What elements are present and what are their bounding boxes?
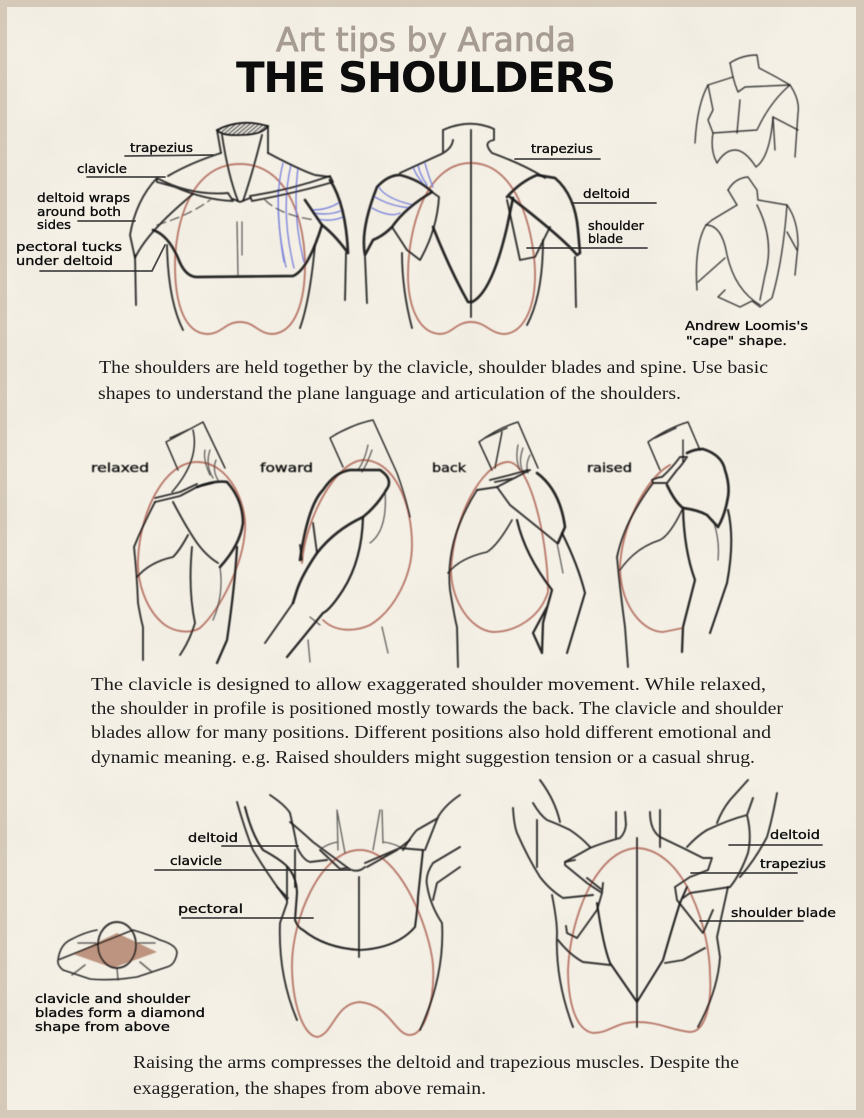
label: diamond caption: blades form a diamond xyxy=(35,1005,205,1020)
right shoulder blade xyxy=(660,837,713,933)
sternum notch xyxy=(233,198,250,202)
rib cage guide xyxy=(302,460,412,630)
deltoid xyxy=(197,482,243,567)
chest side xyxy=(617,483,653,667)
figure: forward xyxy=(260,420,412,662)
labels: front torso xyxy=(16,140,213,271)
label: pectoral tucks xyxy=(16,239,165,271)
label: back: back xyxy=(432,460,467,475)
label: clavicle: clavicle xyxy=(170,853,222,868)
paragraph 3 xyxy=(133,1052,739,1098)
label: deltoid: deltoid xyxy=(583,186,630,201)
neck xyxy=(217,123,268,201)
inner shoulder lines xyxy=(72,943,155,980)
label: pectoral tucks: pectoral tucks xyxy=(16,239,122,254)
label: pectoral: pectoral xyxy=(178,901,243,916)
right deltoid xyxy=(683,780,777,898)
rib cage guide xyxy=(620,465,683,632)
deltoid xyxy=(667,449,729,527)
figure: relaxed xyxy=(91,422,245,663)
left deltoid xyxy=(270,795,327,862)
arm xyxy=(180,547,195,655)
label: andrew loomis cape xyxy=(685,318,808,348)
neck hatch xyxy=(358,445,372,472)
labels: back torso xyxy=(515,141,656,248)
rib cage guide xyxy=(568,848,710,1033)
clavicle xyxy=(652,457,687,483)
label: trapezius xyxy=(515,141,600,159)
arm xyxy=(287,517,363,657)
arms and sides xyxy=(135,255,136,305)
right clavicle xyxy=(365,840,423,867)
title: art tips by aranda: Art tips by Aranda xyxy=(276,20,576,59)
paragraph 2: the shoulder in profile is positioned mostly towards the back. The clavicle and shoulder xyxy=(91,698,783,718)
sternal notch xyxy=(348,867,365,871)
neck xyxy=(330,420,410,517)
muscle direction lines xyxy=(372,163,433,215)
rib cage guide xyxy=(175,164,305,334)
chest side xyxy=(449,490,477,667)
label: deltoid xyxy=(188,830,298,846)
left body xyxy=(277,850,297,1020)
neck right xyxy=(650,810,660,847)
arm xyxy=(710,510,731,633)
center line xyxy=(358,877,360,957)
label: diamond caption xyxy=(35,991,205,1034)
label: deltoid wraps: sides xyxy=(37,217,71,232)
clavicle xyxy=(155,483,213,502)
label: andrew loomis cape: "cape" shape. xyxy=(686,333,787,348)
figure: arms raised back xyxy=(513,780,777,1033)
head xyxy=(98,922,136,968)
figure: front torso xyxy=(130,123,348,334)
label: shoulder blade: blade xyxy=(588,231,623,246)
label: deltoid: deltoid xyxy=(188,830,238,845)
labels: arms raised back xyxy=(691,827,836,921)
scapula xyxy=(370,490,385,543)
label: pectoral tucks: under deltoid xyxy=(16,253,113,268)
neck lines xyxy=(322,810,400,853)
clavicles xyxy=(157,178,233,201)
figure: back torso xyxy=(364,124,580,334)
paragraph 1: shapes to understand the plane language and articulation of the shoulders. xyxy=(98,383,681,403)
diamond shape xyxy=(73,933,157,968)
left clavicle xyxy=(290,822,348,869)
deltoid and clavicle xyxy=(293,470,389,603)
spine xyxy=(636,838,638,1027)
trapezius xyxy=(168,153,221,176)
label: shoulder blade xyxy=(527,218,647,248)
right body xyxy=(665,887,728,1027)
paragraph 1 xyxy=(98,357,768,403)
left body xyxy=(552,895,610,1027)
chest side xyxy=(134,502,155,660)
paragraph 2: blades allow for many positions. Different positions also hold different emotional and xyxy=(91,722,771,742)
label: shoulder blade: shoulder xyxy=(588,218,645,233)
spine xyxy=(470,130,472,317)
pectoral xyxy=(245,807,423,950)
arm xyxy=(517,520,552,653)
pectoral xyxy=(448,520,512,573)
muscle direction lines xyxy=(278,163,343,268)
rib cage guide xyxy=(451,462,548,632)
label: andrew loomis cape: Andrew Loomis's xyxy=(685,318,808,333)
label: raised: raised xyxy=(587,460,632,475)
label: pectoral xyxy=(178,901,313,918)
label: relaxed: relaxed xyxy=(91,460,149,475)
label: clavicle: clavicle xyxy=(77,161,127,176)
left shoulder blade xyxy=(392,192,439,260)
deltoids xyxy=(130,178,193,258)
paragraph 1: The shoulders are held together by the clavicle, shoulder blades and spine. Use basic xyxy=(99,357,768,377)
label: trapezius xyxy=(691,856,826,873)
label: deltoid: deltoid xyxy=(770,827,820,842)
label: deltoid wraps: deltoid wraps xyxy=(37,190,130,205)
paragraph 3: exaggeration, the shapes from above remain. xyxy=(133,1078,486,1098)
paragraph 2: The clavicle is designed to allow exaggerated shoulder movement. While relaxed, xyxy=(91,674,766,694)
paragraph 2 xyxy=(91,674,783,767)
right deltoid xyxy=(507,175,580,255)
paragraph 2: dynamic meaning. e.g. Raised shoulders might suggestion tension or a casual shrug. xyxy=(91,747,755,767)
neck xyxy=(166,422,225,492)
rib cage guide xyxy=(408,163,535,334)
label: shoulder blade xyxy=(700,905,836,921)
paragraph 3: Raising the arms compresses the deltoid and trapezious muscles. Despite the xyxy=(133,1052,739,1072)
figure: view from above xyxy=(58,922,177,980)
pectoral xyxy=(620,510,682,570)
figure: arms raised front xyxy=(237,795,460,1037)
label: deltoid wraps xyxy=(37,190,135,232)
inner v shape xyxy=(433,198,513,302)
right shoulder blade xyxy=(507,200,550,260)
figure: back position xyxy=(432,422,585,667)
labels: arms raised front xyxy=(155,830,350,918)
label: clavicle xyxy=(77,161,165,177)
neck hatch xyxy=(517,445,530,473)
figure: raised xyxy=(587,422,731,667)
dashed pectoral lines xyxy=(157,200,210,225)
figure: cape front xyxy=(695,55,798,167)
right deltoid and arm xyxy=(403,795,460,850)
rib cage guide xyxy=(138,462,245,632)
title: the shoulders: THE SHOULDERS xyxy=(236,53,616,102)
label: trapezius: trapezius xyxy=(130,140,193,155)
deltoid xyxy=(537,473,565,543)
clavicle xyxy=(477,470,530,490)
label: deltoid xyxy=(729,827,822,845)
rib cage guide xyxy=(292,850,433,1037)
label: shoulder blade: shoulder blade xyxy=(731,905,836,920)
label: diamond caption: clavicle and shoulder xyxy=(35,991,191,1006)
outer shoulders xyxy=(58,930,177,980)
left deltoid xyxy=(513,780,593,898)
pectorals xyxy=(153,225,322,277)
arms and sides xyxy=(365,257,367,303)
label: foward: foward xyxy=(260,460,313,475)
neck xyxy=(648,422,700,470)
label: trapezius: trapezius xyxy=(531,141,593,156)
label: trapezius xyxy=(125,140,213,156)
sternum lines xyxy=(237,222,238,275)
label: deltoid xyxy=(573,186,656,203)
label: trapezius: trapezius xyxy=(760,856,826,871)
label: diamond caption: shape from above xyxy=(35,1019,170,1034)
figure: cape back xyxy=(696,177,798,307)
label: deltoid wraps: around both xyxy=(37,204,121,219)
neck hatch lines xyxy=(205,450,218,480)
pectoral xyxy=(137,535,188,577)
left deltoid xyxy=(364,175,432,255)
left arm xyxy=(237,802,287,900)
neck and trapezius xyxy=(400,124,545,178)
v shape xyxy=(597,887,687,1002)
trapezius xyxy=(565,812,626,862)
left shoulder blade xyxy=(565,860,603,938)
neck xyxy=(479,422,538,470)
